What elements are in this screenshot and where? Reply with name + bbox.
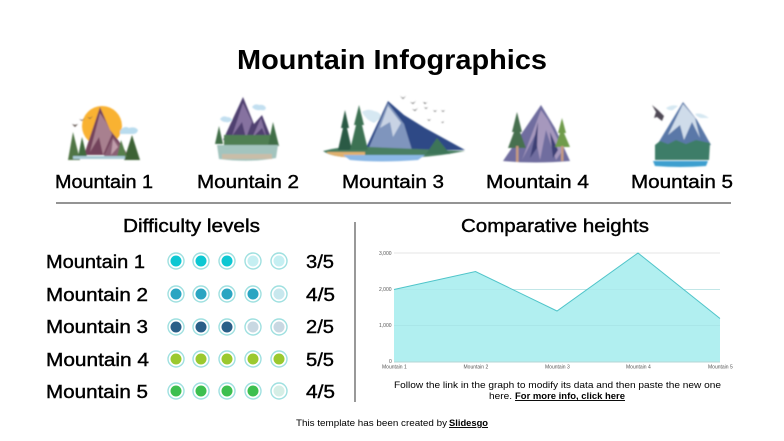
row: mountain 1 difficulty: 3/5: [306, 252, 334, 272]
icon: mountain 3 illustration: [323, 96, 465, 162]
chart: area chart of heights: Mountain 5: [708, 364, 733, 370]
row: mountain 2 difficulty: Mountain 2: [46, 285, 148, 305]
row: mountain 3 difficulty: [46, 317, 334, 337]
panel: difficulty table: [46, 252, 335, 402]
row: mountain 1 difficulty: [46, 252, 334, 272]
chart: area chart of heights: Mountain 3: [545, 364, 570, 370]
chart: area chart of heights: [379, 251, 733, 370]
icon: mountain 1 illustration: [68, 106, 140, 160]
row: mountain 4 difficulty: Mountain 4: [46, 350, 149, 370]
row: mountain 5 difficulty: 4/5: [306, 382, 335, 402]
heading: comparative heights: Comparative heights: [461, 216, 649, 236]
row: mountain 1 difficulty: Mountain 1: [46, 252, 145, 272]
text block: chart note: For more info, click here: [515, 391, 625, 402]
text block: chart note: [394, 380, 721, 402]
heading: difficulty levels: Difficulty levels: [123, 216, 260, 236]
icon: mountain 5 illustration: [652, 102, 711, 167]
chart: area chart of heights: 2,000: [379, 287, 392, 293]
row: mountain 2 difficulty: [46, 285, 335, 305]
text block: chart note: here.: [489, 391, 512, 402]
label: mountain 4: Mountain 4: [486, 172, 589, 192]
row: mountain 4 difficulty: [46, 350, 334, 370]
icon: mountain 4 illustration: [503, 105, 570, 162]
chart: area chart of heights: 3,000: [379, 251, 392, 257]
row: mountain 2 difficulty: 4/5: [306, 285, 335, 305]
row: mountain 3 difficulty: 2/5: [306, 317, 334, 337]
chart: area chart of heights: Mountain 4: [626, 364, 651, 370]
label: mountain 2: Mountain 2: [197, 172, 299, 192]
footer credit: Slidesgo: [449, 418, 488, 429]
chart: area chart of heights: Mountain 2: [464, 364, 488, 370]
label: mountain 5: Mountain 5: [631, 172, 733, 192]
icon: mountain 2 illustration: [215, 97, 279, 161]
title: Mountain Infographics: [237, 44, 547, 75]
text block: chart note: Follow the link in the graph to modify its data and then paste the new one: [394, 380, 721, 391]
row: mountain 4 difficulty: 5/5: [306, 350, 334, 370]
row: mountain 5 difficulty: [46, 382, 335, 402]
panel: mountain gallery: [55, 96, 733, 192]
chart: area chart of heights: Mountain 1: [382, 364, 407, 370]
chart: area chart of heights: 0: [389, 359, 392, 365]
label: mountain 3: Mountain 3: [342, 172, 444, 192]
chart: area chart of heights: 1,000: [379, 323, 392, 329]
row: mountain 5 difficulty: Mountain 5: [46, 382, 148, 402]
label: mountain 1: Mountain 1: [55, 172, 153, 192]
footer credit: This template has been created by: [296, 418, 447, 429]
row: mountain 3 difficulty: Mountain 3: [46, 317, 148, 337]
